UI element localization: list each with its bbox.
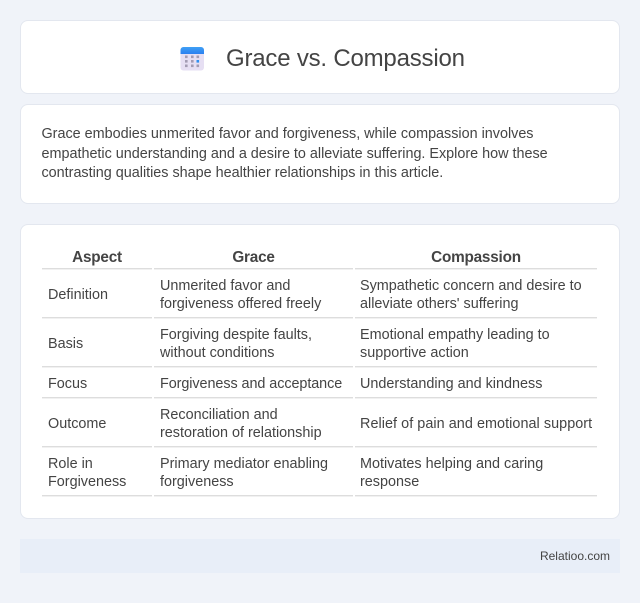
row: focus: Focus bbox=[48, 376, 87, 392]
row: role in forgiveness: Forgiveness bbox=[48, 474, 126, 490]
row: basis: Basis bbox=[48, 336, 83, 352]
row: outcome bbox=[48, 407, 592, 441]
table header: Grace bbox=[232, 249, 275, 266]
row: focus: Understanding and kindness bbox=[360, 376, 542, 392]
row: basis: supportive action bbox=[360, 345, 469, 361]
panel: comparison table bbox=[20, 224, 620, 519]
table header: Compassion bbox=[431, 249, 521, 266]
row: focus bbox=[48, 376, 542, 392]
row: basis bbox=[48, 327, 550, 361]
intro text: empathetic understanding and a desire to alleviate suffering. Explore how these bbox=[42, 146, 548, 162]
row: role in forgiveness: forgiveness bbox=[160, 474, 234, 490]
row: role in forgiveness: response bbox=[360, 474, 419, 490]
row: outcome: Outcome bbox=[48, 416, 106, 432]
row: definition: alleviate others' suffering bbox=[360, 296, 518, 312]
row: role in forgiveness bbox=[48, 456, 543, 490]
row: role in forgiveness: Primary mediator enabling bbox=[160, 456, 328, 472]
footer bar bbox=[20, 539, 620, 573]
row: outcome: Relief of pain and emotional support bbox=[360, 416, 592, 432]
row: definition: Definition bbox=[48, 287, 108, 303]
panel: introduction bbox=[20, 104, 620, 204]
row: definition: Unmerited favor and bbox=[160, 278, 290, 294]
intro text: contrasting qualities shape healthier relationships in this article. bbox=[42, 165, 443, 181]
row: basis: Emotional empathy leading to bbox=[360, 327, 550, 343]
footer credit: Relatioo.com bbox=[540, 549, 610, 563]
row: outcome: restoration of relationship bbox=[160, 425, 322, 441]
row: basis: Forgiving despite faults, bbox=[160, 327, 312, 343]
row: definition: forgiveness offered freely bbox=[160, 296, 321, 312]
intro text bbox=[42, 126, 548, 181]
row: basis: without conditions bbox=[160, 345, 274, 361]
row: role in forgiveness: Role in bbox=[48, 456, 93, 472]
row: focus: Forgiveness and acceptance bbox=[160, 376, 342, 392]
icon: calendar bbox=[180, 47, 204, 70]
table header bbox=[72, 249, 521, 266]
panel: title card bbox=[20, 20, 620, 94]
title: Grace vs. Compassion bbox=[226, 45, 465, 72]
row: outcome: Reconciliation and bbox=[160, 407, 278, 423]
table header: Aspect bbox=[72, 249, 122, 266]
row: role in forgiveness: Motivates helping and caring bbox=[360, 456, 543, 472]
row: definition bbox=[48, 278, 582, 312]
row: definition: Sympathetic concern and desire to bbox=[360, 278, 582, 294]
intro text: Grace embodies unmerited favor and forgiveness, while compassion involves bbox=[42, 126, 534, 142]
